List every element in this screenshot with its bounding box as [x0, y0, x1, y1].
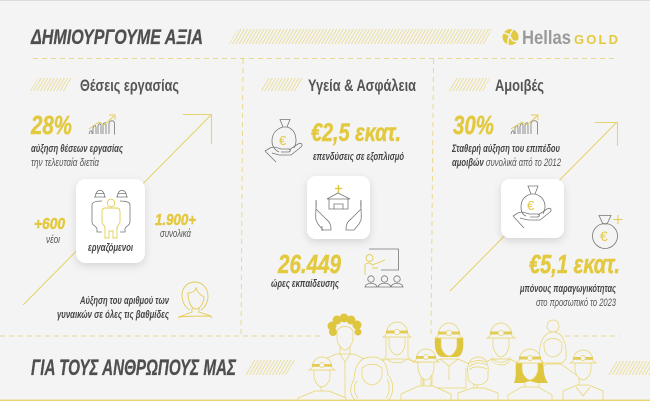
person helmet center — [401, 349, 451, 400]
stat 30%: 30% — [453, 110, 494, 140]
stat +600: +600 — [34, 216, 65, 233]
header — [30, 26, 618, 49]
person long hair — [351, 357, 393, 400]
heading: Υγεία & Ασφάλεια — [308, 76, 416, 95]
heading: Θέσεις εργασίας — [80, 76, 179, 95]
person helmet small left — [298, 357, 346, 400]
heading hatch — [447, 78, 490, 91]
icon: rising bars — [511, 115, 538, 134]
card: money in hand — [501, 179, 564, 238]
person helmet right — [563, 350, 603, 400]
women text line 2: γυναικών σε όλες τις βαθμίδες — [57, 309, 169, 321]
heading: Αμοιβές — [495, 76, 544, 95]
stat subtext: στο προσωπικό το 2023 — [536, 297, 617, 309]
footer title: ΓΙΑ ΤΟΥΣ ΑΝΘΡΩΠΟΥΣ ΜΑΣ — [31, 355, 237, 380]
icon: money bag in hand: € — [279, 133, 287, 148]
icon: bag with plus — [592, 215, 622, 248]
panel: jobs — [23, 76, 212, 321]
logo — [502, 28, 618, 49]
stat subtext: την τελευταία διετία — [31, 157, 100, 169]
heading hatch — [260, 78, 303, 91]
person short hair man — [458, 357, 498, 400]
stat 28%: 28% — [30, 110, 72, 140]
stat text line 1: Σταθερή αύξηση του επιπέδου — [451, 143, 560, 155]
icon: rising bars — [89, 115, 115, 134]
stat hours: 26.449 — [277, 249, 341, 279]
stat text: αύξηση θέσεων εργασίας — [31, 143, 123, 155]
footer — [31, 314, 650, 400]
women text line 1: Αύξηση του αριθμού των — [79, 295, 170, 307]
person curly hair — [321, 314, 369, 400]
person helmet dark hair — [424, 323, 474, 400]
heading hatch — [30, 78, 73, 91]
footer hatch right — [608, 361, 650, 375]
title hatch band — [229, 29, 492, 44]
growth arrow — [450, 122, 618, 291]
icon: training — [365, 249, 403, 287]
footer hatch — [244, 360, 295, 375]
person with bun — [539, 320, 579, 400]
icon: bag and hand: € — [527, 198, 535, 213]
panel: compensation — [447, 76, 622, 309]
icon: workers — [92, 190, 130, 238]
stat amount: €5,1 εκατ. — [529, 249, 620, 279]
stat text: επενδύσεις σε εξοπλισμό — [313, 151, 404, 163]
logo: GOLD — [574, 32, 618, 47]
icon: house and hands — [316, 193, 361, 231]
card label: εργαζόμενοι — [88, 242, 133, 254]
person helmet veil — [371, 322, 423, 400]
stat 1.900+: 1.900+ — [155, 212, 196, 229]
label total: συνολικά — [160, 228, 192, 240]
stat text line 2: αμοιβών συνολικά από το 2012 — [452, 157, 561, 169]
stat amount: €2,5 εκατ. — [311, 119, 401, 147]
logo: Hellas — [522, 28, 571, 49]
icon: plus — [335, 185, 342, 192]
icon: woman — [178, 282, 212, 318]
card: employees — [76, 179, 145, 263]
stat text: ώρες εκπαίδευσης — [271, 278, 339, 290]
card: house in hands — [307, 176, 370, 239]
label new: νέοι — [46, 234, 60, 246]
title: ΔΗΜΙΟΥΡΓΟΥΜΕ ΑΞΙΑ — [30, 26, 203, 49]
icon: bag with plus: € — [600, 228, 608, 244]
person helmet center right — [477, 323, 525, 400]
growth arrow — [23, 114, 212, 305]
panel: health and safety — [260, 76, 416, 290]
illustration: people — [298, 314, 603, 400]
icon: money bag in hand — [265, 120, 302, 162]
person helmet dark hair front — [508, 349, 552, 400]
